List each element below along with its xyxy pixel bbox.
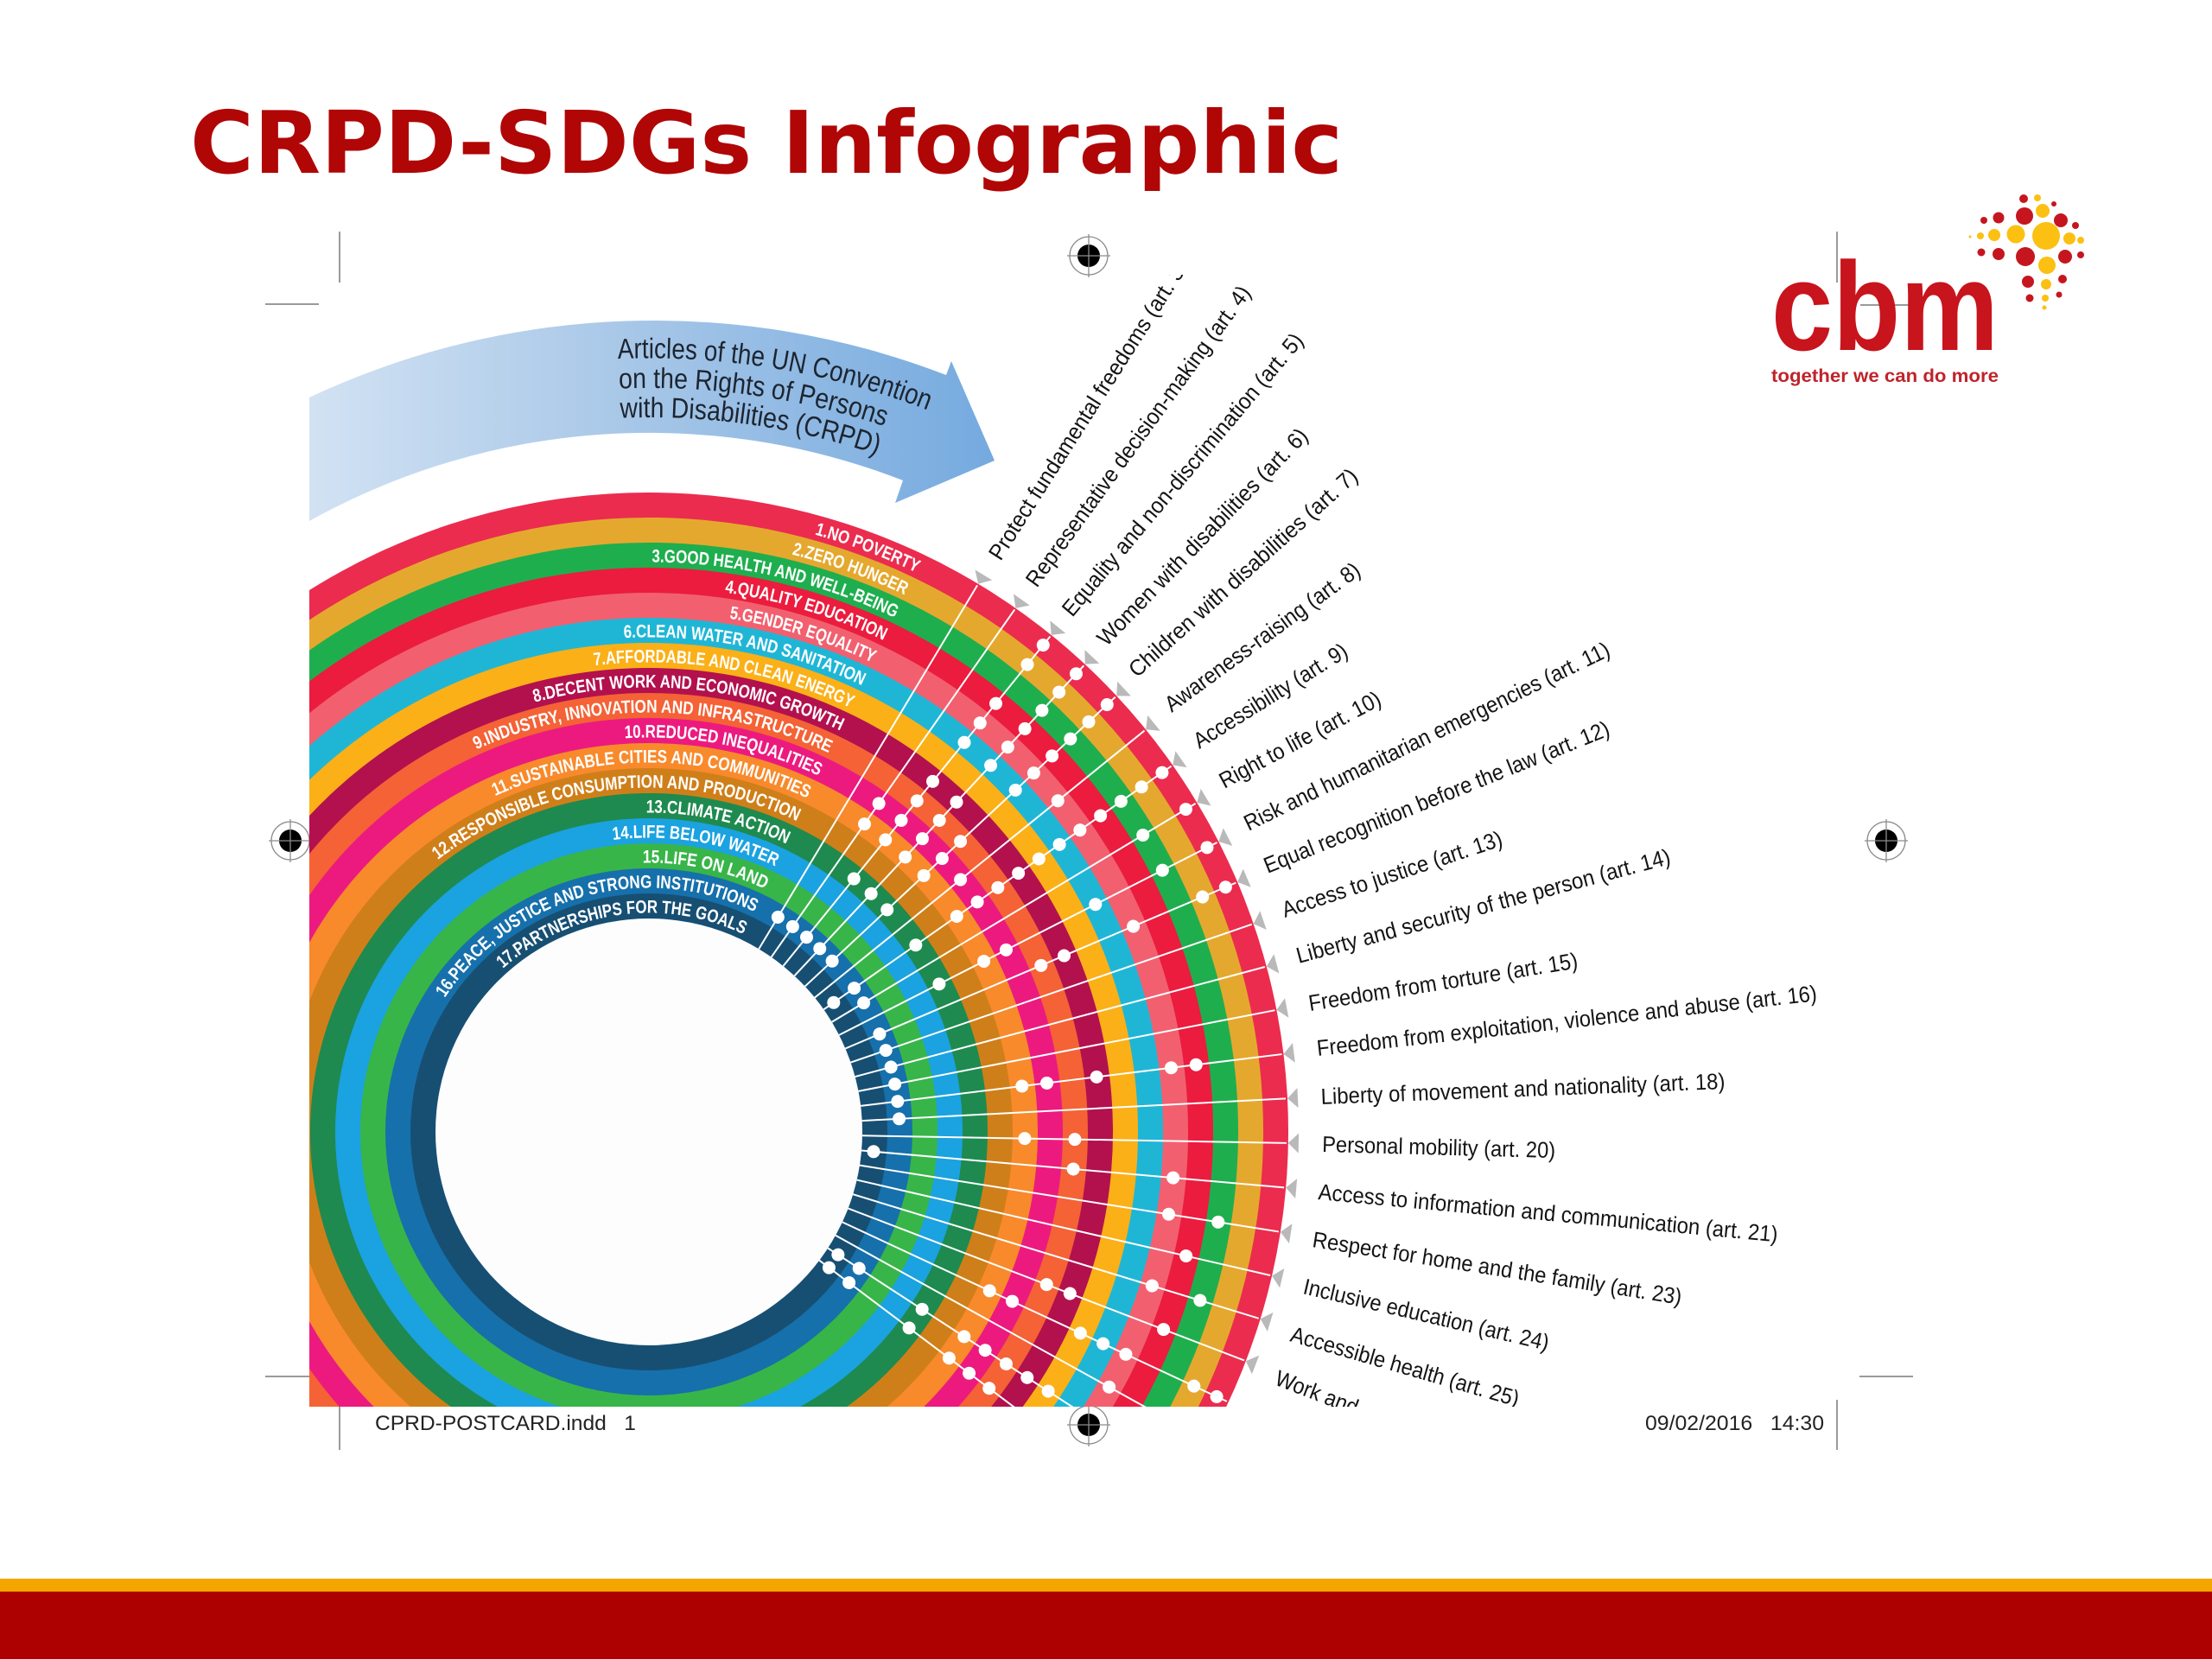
SDG ring labels: 17.PARTNERSHIPS FOR THE GOALS	[497, 900, 747, 968]
SDG ring labels: 2.ZERO HUNGER	[792, 543, 908, 594]
bottom band	[0, 1579, 2212, 1659]
arrow text	[618, 337, 931, 458]
title: CRPD-SDGs Infographic	[190, 92, 1343, 194]
SDG ring labels: 11.SUSTAINABLE CITIES AND COMMUNITIES	[492, 750, 810, 797]
registration mark: left	[269, 819, 312, 862]
arrow text: on the Rights of Persons	[620, 367, 887, 425]
CRPD article labels: Access to justice (art. 13)	[1278, 825, 1505, 923]
registration mark: bottom	[1067, 1403, 1110, 1446]
CRPD article labels: Liberty of movement and nationality (art. 18)	[1320, 1068, 1726, 1109]
CRPD article labels: Access to information and communication (art. 21)	[1317, 1179, 1779, 1247]
SDG rainbow chart	[309, 493, 1300, 1407]
logo wordmark: cbm	[1771, 236, 1999, 377]
CRPD article labels: Right to life (art. 10)	[1215, 686, 1385, 793]
registration mark: right	[1865, 819, 1908, 862]
SDG ring labels: 12.RESPONSIBLE CONSUMPTION AND PRODUCTION	[432, 774, 802, 859]
SDG ring labels: 8.DECENT WORK AND ECONOMIC GROWTH	[532, 675, 845, 731]
logo tagline: together we can do more	[1771, 366, 1999, 386]
article connector lines, dots and arrowheads	[759, 570, 1300, 1407]
CRPD article labels: Risk and humanitarian emergencies (art. 11)	[1240, 636, 1614, 836]
SDG ring labels: 9.INDUSTRY, INNOVATION AND INFRASTRUCTURE	[473, 700, 833, 753]
CRPD article labels: Children with disabilities (art. 7)	[1123, 463, 1363, 682]
SDG ring labels: 10.REDUCED INEQUALITIES	[626, 725, 823, 774]
footer: date: 09/02/2016 14:30	[1645, 1412, 1824, 1435]
arrow text: Articles of the UN Convention	[618, 337, 931, 410]
CRPD article labels: Protect fundamental freedoms (art. 3)	[983, 256, 1193, 564]
CRPD article labels: Liberty and security of the person (art. 14)	[1294, 843, 1673, 969]
crop marks	[265, 232, 1914, 1450]
CRPD article labels: Representative decision-making (art. 4)	[1020, 281, 1255, 592]
SDG ring labels: 14.LIFE BELOW WATER	[613, 825, 779, 866]
CRPD article labels	[983, 256, 1818, 1490]
SDG ring labels: 1.NO POVERTY	[816, 524, 921, 571]
CRPD article labels: Equal recognition before the law (art. 12)	[1260, 715, 1613, 879]
SDG ring labels: 6.CLEAN WATER AND SANITATION	[624, 624, 867, 685]
arrow text: with Disabilities (CRPD)	[620, 397, 880, 458]
SDG ring labels: 3.GOOD HEALTH AND WELL-BEING	[652, 550, 899, 617]
SDG ring labels: 4.QUALITY EDUCATION	[725, 581, 888, 640]
CRPD article labels: Equality and non-discrimination (art. 5)	[1057, 327, 1308, 621]
SDG ring labels: 7.AFFORDABLE AND CLEAN ENERGY	[593, 650, 855, 707]
logo: cbm	[1771, 194, 2084, 386]
registration mark: top	[1067, 234, 1110, 277]
SDG ring labels	[432, 524, 921, 997]
CRPD article labels: Freedom from torture (art. 15)	[1306, 947, 1580, 1016]
SDG ring labels: 16.PEACE, JUSTICE AND STRONG INSTITUTIONS	[436, 874, 759, 997]
logo dots	[1968, 194, 2084, 309]
CRPD article labels: Work and employment (art. 27)	[1272, 1365, 1543, 1490]
CRPD article labels: Accessible health (art. 25)	[1287, 1321, 1522, 1412]
CRPD article labels: Personal mobility (art. 20)	[1322, 1131, 1556, 1163]
CRPD article labels: Inclusive education (art. 24)	[1301, 1274, 1552, 1356]
rings	[309, 493, 1288, 1407]
footer: file name: CPRD-POSTCARD.indd 1	[375, 1412, 636, 1435]
CRPD article labels: Awareness-raising (art. 8)	[1160, 556, 1365, 717]
SDG ring labels: 13.CLIMATE ACTION	[646, 800, 791, 843]
CRPD article labels: Freedom from exploitation, violence and abuse (art. 16)	[1315, 980, 1818, 1061]
SDG ring labels: 5.GENDER EQUALITY	[730, 607, 878, 662]
CRPD article labels: Respect for home and the family (art. 23)	[1311, 1226, 1684, 1310]
arrow: CRPD articles	[309, 321, 995, 521]
SDG ring labels: 15.LIFE ON LAND	[643, 850, 768, 887]
CRPD article labels: Accessibility (art. 9)	[1188, 638, 1352, 753]
CRPD article labels: Women with disabilities (art. 6)	[1091, 423, 1313, 651]
